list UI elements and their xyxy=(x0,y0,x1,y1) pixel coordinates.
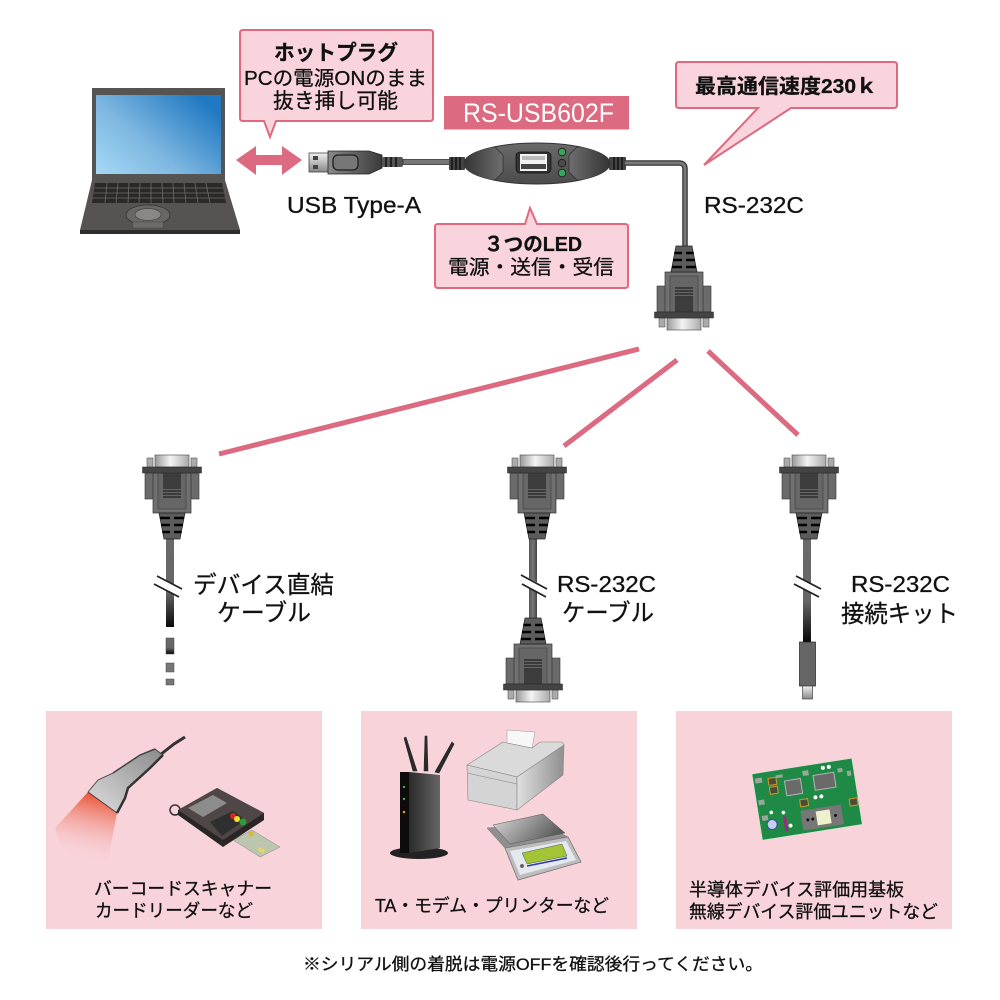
label: device direct cable: ケーブル xyxy=(217,600,311,627)
callout: hot plug: ホットプラグ xyxy=(274,41,398,65)
icon: laptop computer xyxy=(80,88,240,234)
callout: hot plug: PCの電源ONのまま xyxy=(244,67,427,90)
text: scanner caption: バーコードスキャナー xyxy=(94,879,272,899)
icon: receipt printer xyxy=(467,730,564,810)
icon: digital scale xyxy=(487,814,581,880)
footnote: ※シリアル側の着脱は電源OFFを確認後行ってください。 xyxy=(303,955,763,974)
text: scanner caption: カードリーダーなど xyxy=(95,901,253,921)
label: RS-232C connection kit: RS-232C xyxy=(851,571,950,597)
label: device direct cable: デバイス直結 xyxy=(193,572,334,599)
text: board caption: 半導体デバイス評価用基板 xyxy=(689,880,904,900)
text: board caption: 無線デバイス評価ユニットなど xyxy=(689,902,938,922)
callout: three LEDs xyxy=(435,208,628,288)
text: board caption xyxy=(689,880,938,922)
connector: RS-232C output xyxy=(654,246,714,330)
panel: evaluation boards xyxy=(676,711,952,929)
callout: three LEDs: 電源・送信・受信 xyxy=(448,256,614,279)
label: RS-232C cable: ケーブル xyxy=(562,600,654,627)
panel: TA, modem and printer xyxy=(361,711,637,929)
label: RS-232C cable xyxy=(557,571,656,627)
heading: model name: RS-USB602F xyxy=(463,98,614,128)
callout: hot plug xyxy=(240,30,433,137)
label: RS-232C connection kit: 接続キット xyxy=(841,601,958,628)
RS-232C kit assembly xyxy=(780,455,838,699)
icon: card reader xyxy=(170,788,280,857)
callout: hot plug: 抜き挿し可能 xyxy=(273,90,398,113)
icon: USB serial converter xyxy=(449,143,626,184)
icon: circuit board xyxy=(752,758,862,840)
cable: converter to RS-232C xyxy=(625,163,685,250)
arrow: laptop to USB connection xyxy=(236,146,302,175)
label: RS-232C: RS-232C xyxy=(704,192,804,218)
icon: router xyxy=(390,736,454,859)
text: printer caption: TA・モデム・プリンターなど xyxy=(375,896,609,916)
text: scanner caption xyxy=(94,879,272,921)
icon: barcode scanner xyxy=(55,737,185,860)
label: RS-232C connection kit xyxy=(841,571,958,628)
callout: three LEDs: ３つのLED xyxy=(484,234,582,256)
panel: scanners and card readers xyxy=(46,711,322,929)
label: device direct cable xyxy=(193,572,334,627)
device cable assembly xyxy=(142,455,202,685)
callout: maximum speed xyxy=(676,62,897,165)
label: RS-232C cable: RS-232C xyxy=(557,571,656,597)
label: USB Type-A: USB Type-A xyxy=(287,192,422,218)
callout: maximum speed: 最高通信速度230ｋ xyxy=(695,75,877,98)
branch lines xyxy=(219,349,798,454)
RS-232C cable assembly xyxy=(504,455,566,702)
icon: USB Type-A plug xyxy=(309,151,450,174)
